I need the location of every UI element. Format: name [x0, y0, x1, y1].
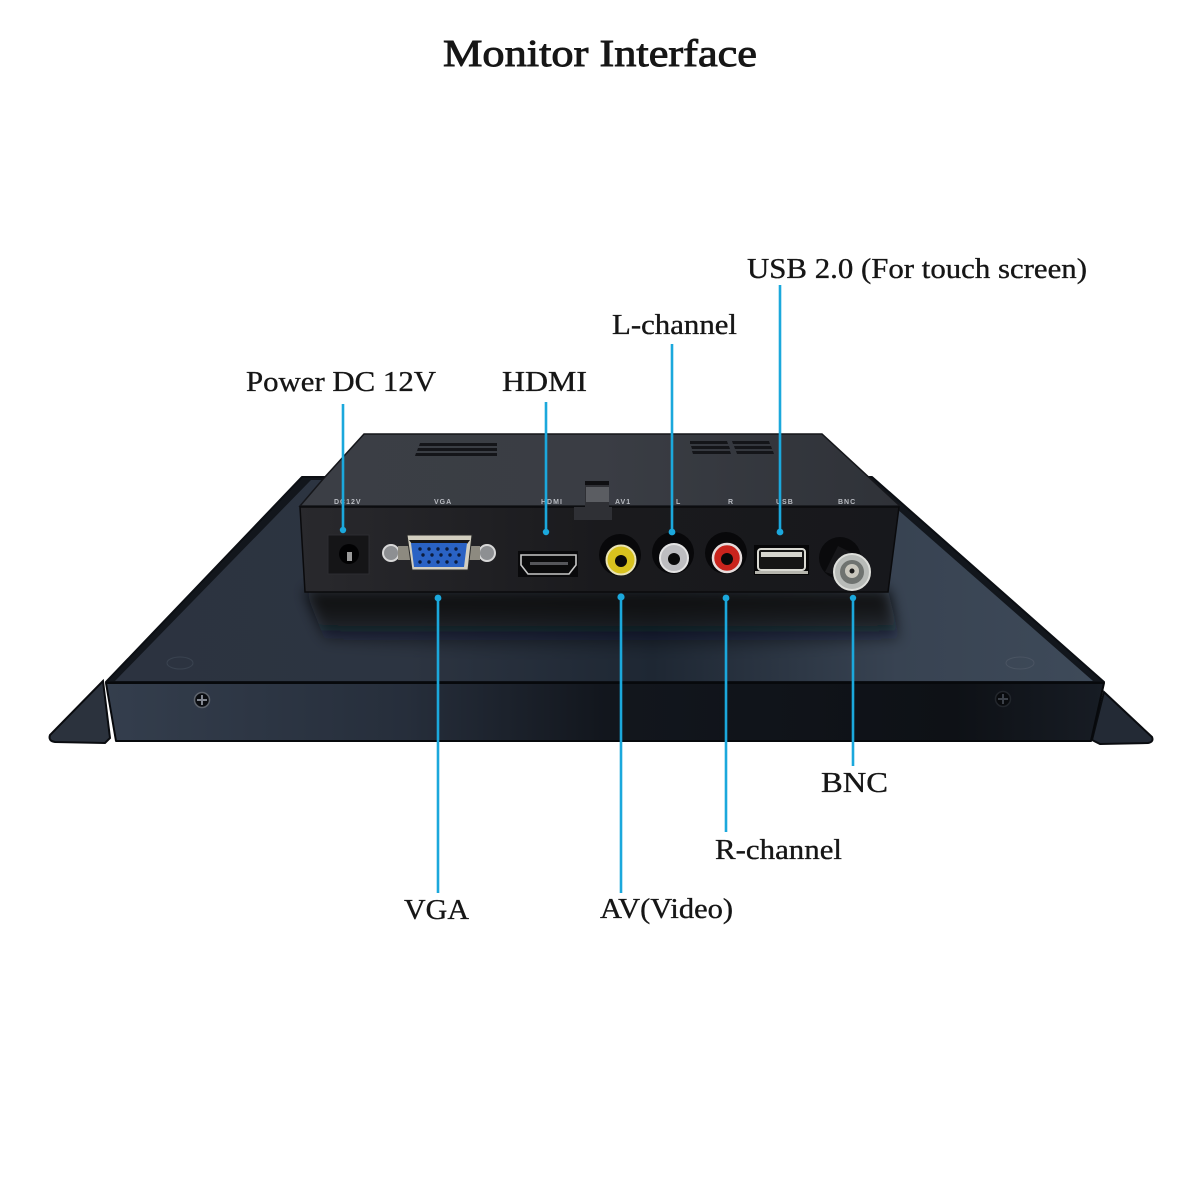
vents right	[690, 441, 774, 454]
front edge of monitor	[106, 683, 1104, 741]
callout: L-channel: L-channel	[612, 310, 737, 341]
screw right	[996, 692, 1010, 706]
right mounting ear	[1092, 692, 1152, 744]
panel dimple left	[167, 657, 193, 669]
callout: BNC	[821, 595, 888, 799]
callout: VGA	[404, 595, 470, 926]
monitor illustration	[50, 434, 1153, 744]
callout: AV(Video)	[600, 593, 733, 925]
cable notch	[574, 481, 612, 520]
callout: USB 2.0	[747, 254, 1087, 535]
callout: R-channel	[715, 595, 842, 866]
silkscreen labels: BNC	[838, 499, 856, 506]
control box top face	[300, 434, 900, 506]
panel dimple right	[1006, 657, 1034, 669]
port: L white RCA	[652, 532, 694, 574]
port: VGA	[383, 535, 495, 570]
vents left	[415, 443, 497, 456]
port: DC power	[328, 535, 369, 574]
rear panel of monitor	[115, 480, 1093, 681]
port: USB	[754, 545, 809, 575]
callout: BNC: BNC	[821, 768, 888, 799]
port: AV yellow RCA	[599, 534, 641, 576]
callout: AV(Video): AV(Video)	[600, 894, 733, 925]
callout: HDMI	[502, 367, 587, 535]
left mounting ear	[50, 681, 110, 743]
silkscreen labels: DC12V	[334, 499, 362, 506]
port: BNC	[819, 537, 870, 590]
screw left	[194, 692, 210, 708]
silkscreen labels: R	[728, 499, 734, 506]
silkscreen labels: VGA	[434, 499, 452, 506]
control box front face	[300, 507, 899, 592]
silkscreen labels: HDMI	[541, 499, 563, 506]
silkscreen labels: L	[676, 499, 681, 506]
callout: USB 2.0: USB 2.0 (For touch screen)	[747, 254, 1087, 285]
callout: VGA: VGA	[404, 895, 470, 926]
shadow under control box	[305, 590, 900, 652]
rear panel rim	[106, 477, 1104, 682]
silkscreen labels: AV1	[615, 499, 631, 506]
callout: HDMI: HDMI	[502, 367, 587, 398]
port: R red RCA	[705, 532, 747, 574]
callout: Power DC 12V	[246, 367, 436, 533]
silkscreen labels: USB	[776, 499, 794, 506]
callout: L-channel	[612, 310, 737, 535]
silkscreen labels	[334, 499, 856, 506]
callout: Power DC 12V: Power DC 12V	[246, 367, 436, 398]
callout: R-channel: R-channel	[715, 835, 842, 866]
port: HDMI	[518, 551, 578, 577]
title: Monitor Interface	[443, 33, 757, 75]
